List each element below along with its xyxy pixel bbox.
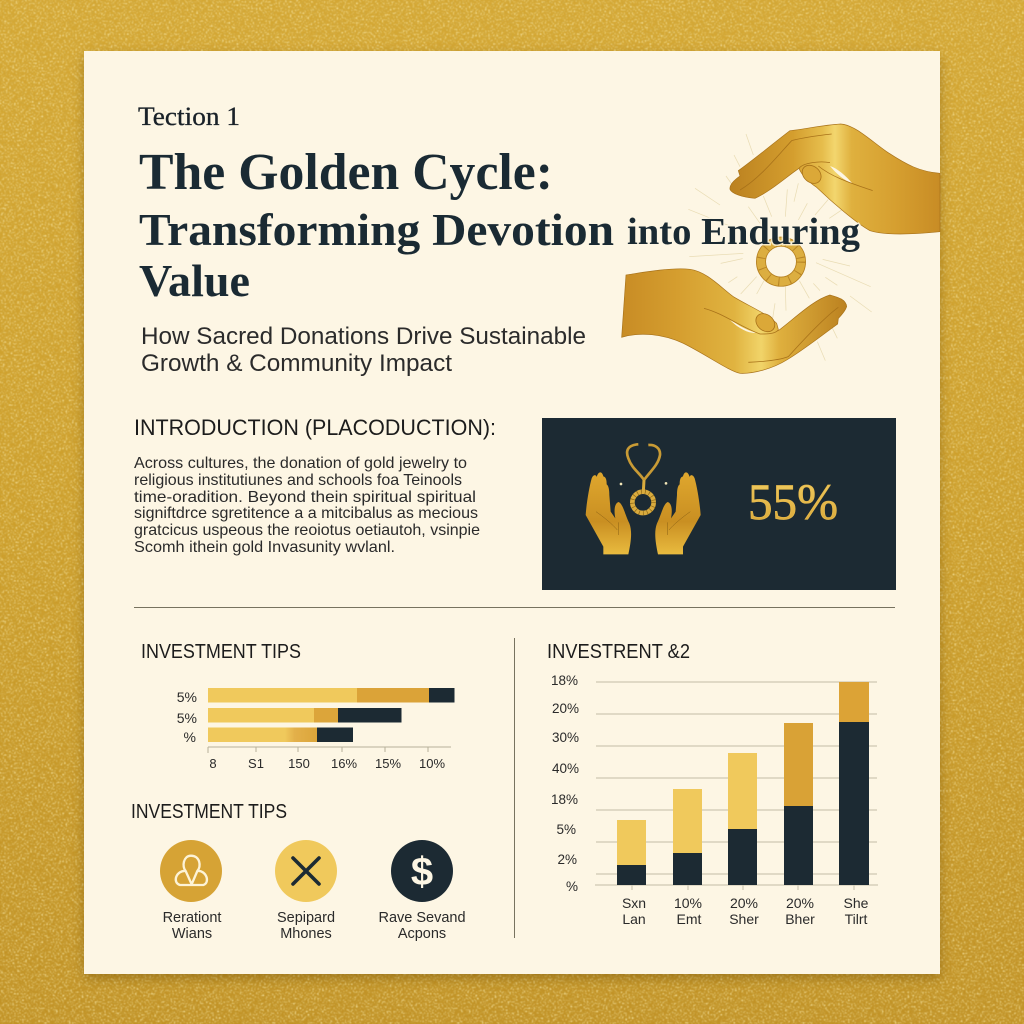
subtitle <box>141 323 586 377</box>
stacked column chart: Bher <box>785 911 815 927</box>
stacked column chart: 2% <box>557 852 577 867</box>
introduction paragraph <box>134 455 480 556</box>
horizontal stacked bar chart: % <box>184 729 196 745</box>
tip 2: Mhones <box>280 926 332 942</box>
horizontal stacked bar chart: 150 <box>288 756 310 771</box>
horizontal stacked bar chart: 8 <box>209 756 217 771</box>
stacked column chart: 30% <box>552 730 579 745</box>
title: into Enduring <box>627 211 860 253</box>
title: Value <box>139 255 250 306</box>
dark stat panel <box>542 418 896 590</box>
stacked column chart: 10% <box>674 895 702 911</box>
subtitle: Growth & Community Impact <box>141 350 452 377</box>
stacked column chart: Tilrt <box>845 911 868 927</box>
stacked column chart: She <box>844 895 869 911</box>
stacked column chart <box>551 673 878 927</box>
top hand <box>730 124 940 234</box>
gold ring <box>761 242 801 282</box>
horizontal stacked bar chart: 5% <box>177 689 197 705</box>
stacked column chart: 18% <box>551 792 578 807</box>
introduction paragraph: time-oradition. Beyond thein spiritual spiritual <box>134 489 476 506</box>
tip 2: Sepipard <box>277 910 335 926</box>
horizontal stacked bar chart: 15% <box>375 756 401 771</box>
section label: Tection 1 <box>138 102 240 131</box>
heading: investment chart: INVESTRENT &2 <box>547 641 690 663</box>
tip 1: Rerationt <box>163 910 221 926</box>
tip 3: Acpons <box>398 926 446 942</box>
heading: investment tips: INVESTMENT TIPS <box>141 641 301 663</box>
introduction paragraph: religious institutiunes and schools foa Teinools <box>134 472 462 489</box>
title: Transforming Devotion <box>139 205 614 255</box>
stacked column chart: Lan <box>622 911 646 927</box>
stacked column chart: 20% <box>786 895 814 911</box>
stacked column chart: % <box>566 879 578 894</box>
horizontal stacked bar chart: S1 <box>248 756 264 771</box>
introduction heading: INTRODUCTION (PLACODUCTION): <box>134 415 496 440</box>
horizontal stacked bar chart: 10% <box>419 756 445 771</box>
introduction paragraph: gratcicus uspeous the reoiotus oetiautoh, vsinpie <box>134 522 480 539</box>
stacked column chart: 20% <box>730 895 758 911</box>
icon: hands with necklace <box>586 444 701 554</box>
tip 2 <box>275 840 337 942</box>
horizontal stacked bar chart: 5% <box>177 710 197 726</box>
tip 3: Rave Sevand <box>378 910 466 926</box>
radiating rays <box>688 134 872 361</box>
stacked column chart: 20% <box>552 701 579 716</box>
stacked column chart: 40% <box>552 761 579 776</box>
stacked column chart: Sxn <box>622 895 646 911</box>
stacked column chart: Emt <box>677 911 702 927</box>
introduction paragraph: signiftdrce sgretitence a a mitcibalus as mecious <box>134 505 478 522</box>
title: The Golden Cycle: <box>139 144 553 201</box>
tip 1 <box>160 840 222 942</box>
tip 3: $ <box>411 850 433 894</box>
stacked column chart: 18% <box>551 673 578 688</box>
tip 3 <box>378 840 466 942</box>
bottom hand <box>622 269 847 373</box>
stacked column chart: Sher <box>729 911 759 927</box>
horizontal stacked bar chart <box>177 688 454 771</box>
introduction paragraph: Across cultures, the donation of gold jewelry to <box>134 455 467 472</box>
stat: 55%: 55% <box>748 475 838 531</box>
tip 1: Wians <box>172 926 212 942</box>
illustration: hands holding gold ring <box>622 124 940 373</box>
title <box>139 144 860 306</box>
heading: investment tips 2: INVESTMENT TIPS <box>131 801 287 823</box>
stacked column chart: 5% <box>556 822 576 837</box>
cream panel <box>84 51 940 974</box>
introduction paragraph: Scomh ithein gold Invasunity wvlanl. <box>134 539 395 556</box>
subtitle: How Sacred Donations Drive Sustainable <box>141 323 586 350</box>
horizontal stacked bar chart: 16% <box>331 756 357 771</box>
